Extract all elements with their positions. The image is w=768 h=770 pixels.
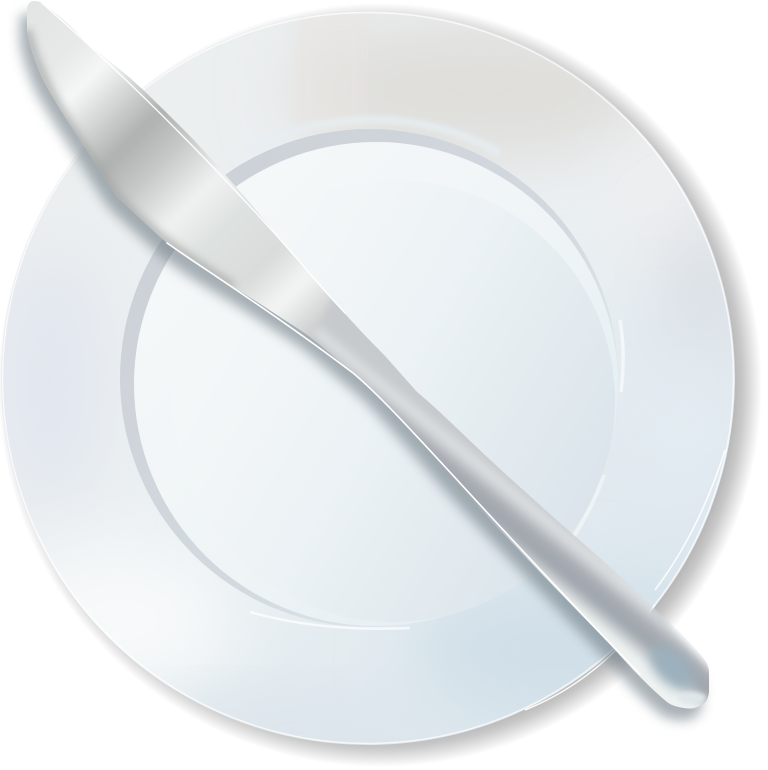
plate ring highlight bbox=[245, 120, 500, 153]
plate inner ring bbox=[120, 129, 618, 627]
plate glints bbox=[250, 320, 725, 710]
plate well bbox=[134, 142, 618, 626]
plate well floor bbox=[173, 180, 615, 622]
knife edge highlights bbox=[42, 3, 640, 674]
